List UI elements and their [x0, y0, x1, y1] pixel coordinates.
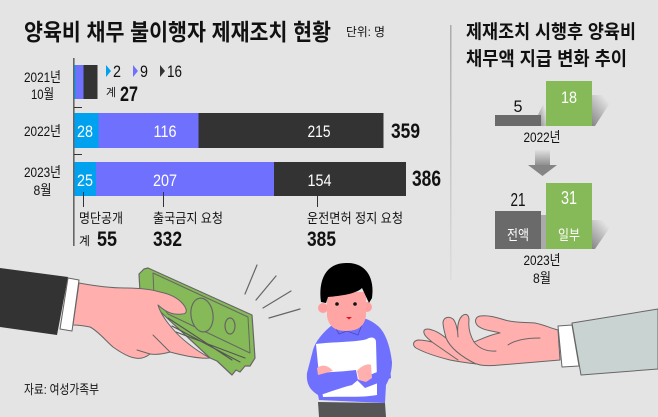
bars: 2022	[495, 81, 615, 145]
row: October 2021: 계	[106, 86, 116, 99]
source note: 자료: 여성가족부	[24, 382, 99, 397]
bars: 2022: 5	[514, 97, 522, 116]
row: August 2023: 154	[308, 171, 332, 190]
row: October 2021: 9	[140, 62, 148, 81]
row: 2022: 116	[154, 122, 176, 141]
title: 양육비 채무 불이행자 제재조치 현황	[24, 19, 331, 45]
row: October 2021: 27	[120, 83, 138, 106]
bars: August 2023: 31	[561, 188, 577, 208]
category: public disclosure: 계	[79, 234, 90, 248]
row: August 2023: 25	[77, 171, 93, 190]
bars: August 2023: 8월	[533, 270, 551, 286]
category: public disclosure: 명단공개	[79, 211, 123, 226]
bars: 2022: 2022년	[524, 129, 560, 145]
icon: open receiving hand	[414, 309, 658, 375]
category: travel ban	[153, 192, 223, 251]
row: 2022: 28	[77, 122, 93, 141]
row: 2022: 2022년	[24, 123, 61, 139]
row: October 2021: 2021년	[24, 69, 61, 85]
heading: payment change: 채무액 지급 변화 추이	[466, 48, 627, 70]
icon: hand giving money	[0, 265, 300, 375]
row: October 2021: 10월	[31, 86, 54, 102]
bars: August 2023: 전액	[507, 227, 529, 243]
bars: August 2023	[495, 183, 615, 286]
row: October 2021: 16	[167, 62, 182, 81]
bars: August 2023: 21	[510, 190, 526, 210]
row: August 2023: 2023년	[24, 164, 61, 180]
category: license suspension	[307, 192, 403, 251]
row: October 2021	[24, 62, 182, 106]
row: August 2023: 207	[153, 171, 177, 190]
bars: August 2023: 2023년	[524, 252, 560, 268]
row: August 2023: 8월	[34, 182, 52, 198]
row: August 2023	[24, 162, 441, 198]
row: August 2023: 386	[412, 166, 441, 191]
category: travel ban: 출국금지 요청	[153, 211, 223, 226]
arrow: down	[528, 150, 557, 176]
category: license suspension: 385	[307, 228, 336, 251]
panel: payment change chart	[466, 21, 636, 286]
category: license suspension: 운전면허 정지 요청	[307, 211, 403, 226]
category: travel ban: 332	[153, 228, 182, 251]
panel: stacked bar chart	[24, 58, 441, 251]
icon: worried boy with pillow	[307, 263, 392, 417]
unit note: 단위: 명	[346, 25, 385, 39]
row: 2022: 215	[308, 122, 330, 141]
row: 2022: 359	[391, 120, 420, 143]
heading: payment change	[466, 21, 636, 70]
heading: payment change: 제재조치 시행후 양육비	[466, 21, 636, 43]
motion lines	[245, 265, 300, 318]
category: public disclosure	[79, 192, 123, 251]
row: October 2021: 2	[113, 62, 121, 81]
bars: August 2023: 일부	[558, 227, 580, 243]
bars: 2022: 18	[561, 88, 577, 107]
category: public disclosure: 55	[97, 228, 117, 251]
row: 2022	[24, 113, 420, 148]
